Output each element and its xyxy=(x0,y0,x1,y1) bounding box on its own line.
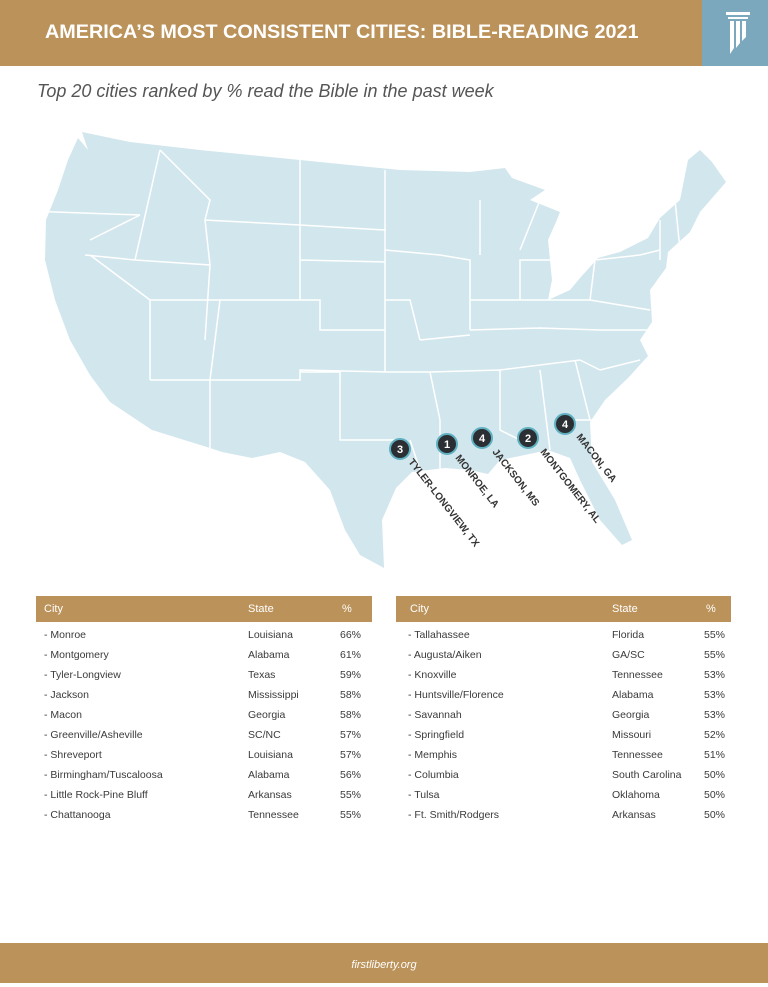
table: right: - Columbia xyxy=(408,769,459,781)
table: left: Alabama xyxy=(248,769,289,781)
table: left: - Montgomery xyxy=(44,649,109,661)
table: right: Alabama xyxy=(612,689,653,701)
table: right: City xyxy=(410,603,429,615)
table: left: City xyxy=(44,603,63,615)
table: left: % xyxy=(342,603,352,615)
table: left: Louisiana xyxy=(248,749,293,761)
table: right xyxy=(396,596,731,821)
table: right: South Carolina xyxy=(612,769,681,781)
marker: Montgomery: MONTGOMERY, AL xyxy=(538,447,602,526)
table: right: Florida xyxy=(612,629,644,641)
marker: Jackson xyxy=(472,428,541,509)
table: right: Missouri xyxy=(612,729,651,741)
map xyxy=(45,132,726,568)
table: left: 59% xyxy=(340,669,361,681)
table: left: Tennessee xyxy=(248,809,299,821)
marker: Monroe xyxy=(437,434,501,510)
table: right: - Tulsa xyxy=(408,789,440,801)
marker: Montgomery: 2 xyxy=(525,433,531,445)
table: right: 53% xyxy=(704,689,725,701)
marker: Tyler-Longview: 3 xyxy=(397,444,403,456)
title: AMERICA’S MOST CONSISTENT CITIES: BIBLE-READING 2021 xyxy=(45,21,639,43)
table: right: 50% xyxy=(704,769,725,781)
table: right: - Memphis xyxy=(408,749,457,761)
header bar xyxy=(0,0,768,66)
table: right: 52% xyxy=(704,729,725,741)
table: right: - Springfield xyxy=(408,729,464,741)
table: left: SC/NC xyxy=(248,729,281,741)
footer: firstliberty.org xyxy=(351,959,417,971)
table: left: Arkansas xyxy=(248,789,292,801)
marker: Montgomery xyxy=(518,428,602,526)
table: left: 57% xyxy=(340,749,361,761)
table: left: 56% xyxy=(340,769,361,781)
table: right: 53% xyxy=(704,669,725,681)
table: right: GA/SC xyxy=(612,649,645,661)
table: left: Texas xyxy=(248,669,275,681)
table: right: - Ft. Smith/Rodgers xyxy=(408,809,499,821)
table: left: - Shreveport xyxy=(44,749,102,761)
table: left: Alabama xyxy=(248,649,289,661)
marker: Tyler-Longview xyxy=(390,439,481,549)
marker: Macon xyxy=(555,414,618,485)
marker: Monroe: MONROE, LA xyxy=(453,453,501,510)
markers xyxy=(390,414,618,549)
marker: Jackson: 4 xyxy=(479,433,486,445)
marker: Monroe: 1 xyxy=(444,439,450,451)
table: right: Oklahoma xyxy=(612,789,660,801)
table: right: State xyxy=(612,603,638,615)
table: left: - Monroe xyxy=(44,629,86,641)
table: right: - Tallahassee xyxy=(408,629,470,641)
table: left: 55% xyxy=(340,809,361,821)
table: right: - Huntsville/Florence xyxy=(408,689,504,701)
table: left: - Tyler-Longview xyxy=(44,669,121,681)
marker: Jackson: JACKSON, MS xyxy=(490,447,541,509)
table: right: Georgia xyxy=(612,709,649,721)
marker: Tyler-Longview: TYLER-LONGVIEW, TX xyxy=(406,457,481,549)
table: right: - Savannah xyxy=(408,709,462,721)
table: right: 55% xyxy=(704,629,725,641)
table: left: - Greenville/Asheville xyxy=(44,729,143,741)
subtitle: Top 20 cities ranked by % read the Bible in the past week xyxy=(37,81,494,101)
table: right: 50% xyxy=(704,809,725,821)
table: left: Mississippi xyxy=(248,689,299,701)
table: left: 61% xyxy=(340,649,361,661)
table: right: Tennessee xyxy=(612,749,663,761)
table: right: Tennessee xyxy=(612,669,663,681)
table: left: - Chattanooga xyxy=(44,809,111,821)
table: left: 55% xyxy=(340,789,361,801)
table: left: 66% xyxy=(340,629,361,641)
table: right: 51% xyxy=(704,749,725,761)
table: left xyxy=(36,596,372,821)
table: right: 53% xyxy=(704,709,725,721)
marker: Macon: MACON, GA xyxy=(574,432,618,485)
marker: Macon: 4 xyxy=(562,419,569,431)
table: right: 50% xyxy=(704,789,725,801)
table: right: - Knoxville xyxy=(408,669,456,681)
footer xyxy=(0,943,768,983)
table: right: Arkansas xyxy=(612,809,656,821)
table: left: - Jackson xyxy=(44,689,89,701)
logo xyxy=(702,0,768,66)
table: left: 58% xyxy=(340,709,361,721)
table: left: 58% xyxy=(340,689,361,701)
table: left: 57% xyxy=(340,729,361,741)
table: right: - Augusta/Aiken xyxy=(408,649,482,661)
table: left: - Little Rock-Pine Bluff xyxy=(44,789,148,801)
table: left: State xyxy=(248,603,274,615)
table: left: Louisiana xyxy=(248,629,293,641)
table: left: Georgia xyxy=(248,709,285,721)
table: right: % xyxy=(706,603,716,615)
table: left: - Macon xyxy=(44,709,82,721)
table: right: 55% xyxy=(704,649,725,661)
table: left: - Birmingham/Tuscaloosa xyxy=(44,769,163,781)
